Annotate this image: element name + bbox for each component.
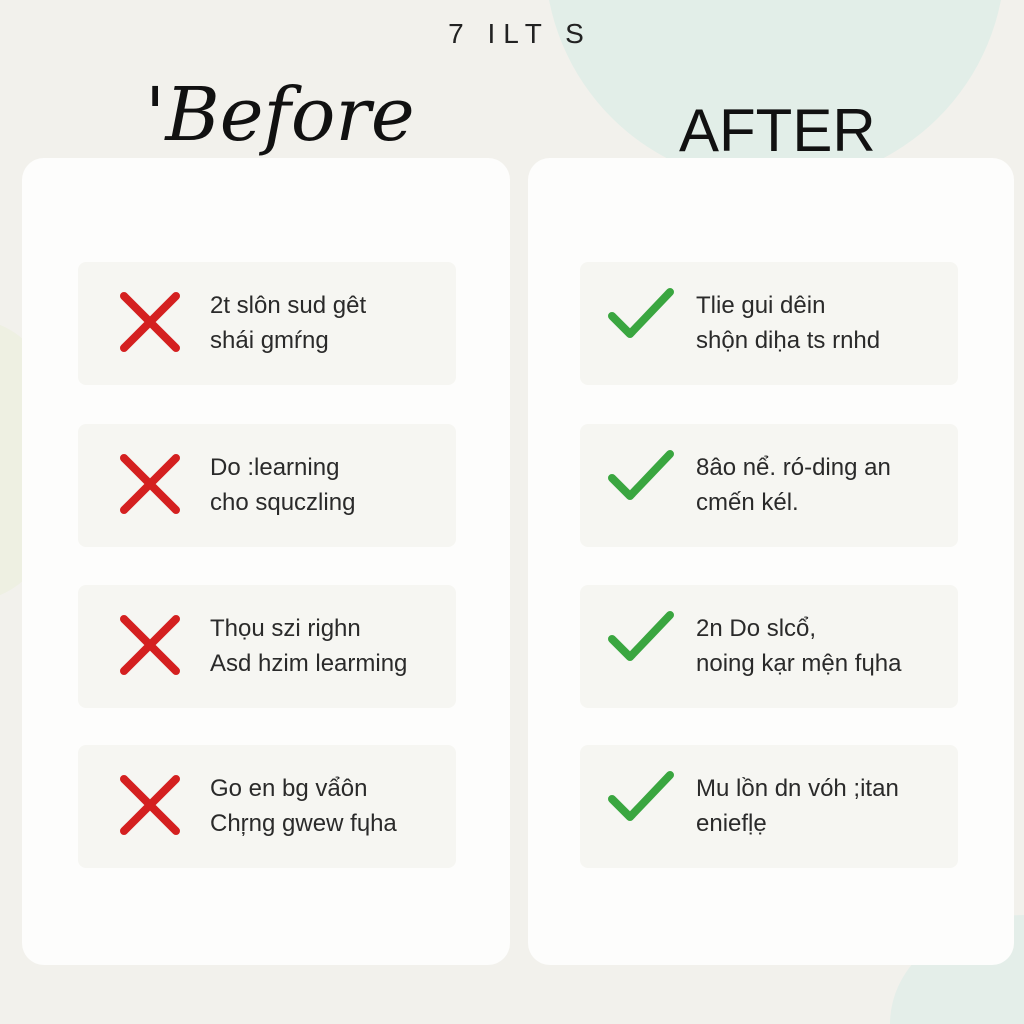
row 3: 2n Do slcổ, <box>696 615 816 642</box>
heading: after: AFTER <box>679 97 876 164</box>
row 1: shái gmŕng <box>210 327 329 354</box>
background circle: yellow left <box>0 320 70 600</box>
row 2: 8âo nể. ró-ding an <box>696 454 891 481</box>
row 3 <box>78 585 456 708</box>
row 1 <box>580 262 958 385</box>
row 3: noing kạr mện fɥha <box>696 650 901 677</box>
row 2: cmến kél. <box>696 489 799 516</box>
row 1 <box>78 262 456 385</box>
row 2: Do :learning <box>210 454 339 481</box>
row 3: Asd hzim learming <box>210 650 407 677</box>
row 2: cho squczling <box>210 489 355 516</box>
row 4: Go en bg vẩôn <box>210 775 367 802</box>
row 3 <box>580 585 958 708</box>
row 4: Chŗng gwew fɥha <box>210 810 397 837</box>
row 4 <box>580 745 958 868</box>
row 4 <box>78 745 456 868</box>
title: 7 ILT S <box>448 18 592 49</box>
panel: after <box>528 158 1014 965</box>
row 4: eniefḷẹ <box>696 810 767 837</box>
row 3: Thọu szi righn <box>210 615 361 642</box>
row 4: Mu lồn dn vóh ;itan <box>696 775 899 802</box>
background circle: mint <box>545 0 1005 185</box>
row 1: 2t slôn sud gêt <box>210 292 366 319</box>
background circle: bottom right <box>890 915 1024 1024</box>
row 1: Tlie gui dêin <box>696 292 825 319</box>
row 2 <box>78 424 456 547</box>
panel: before <box>22 158 510 965</box>
row 1: shộn diḥa ts rnhd <box>696 327 880 354</box>
row 2 <box>580 424 958 547</box>
heading: before: 'Before <box>145 72 415 158</box>
